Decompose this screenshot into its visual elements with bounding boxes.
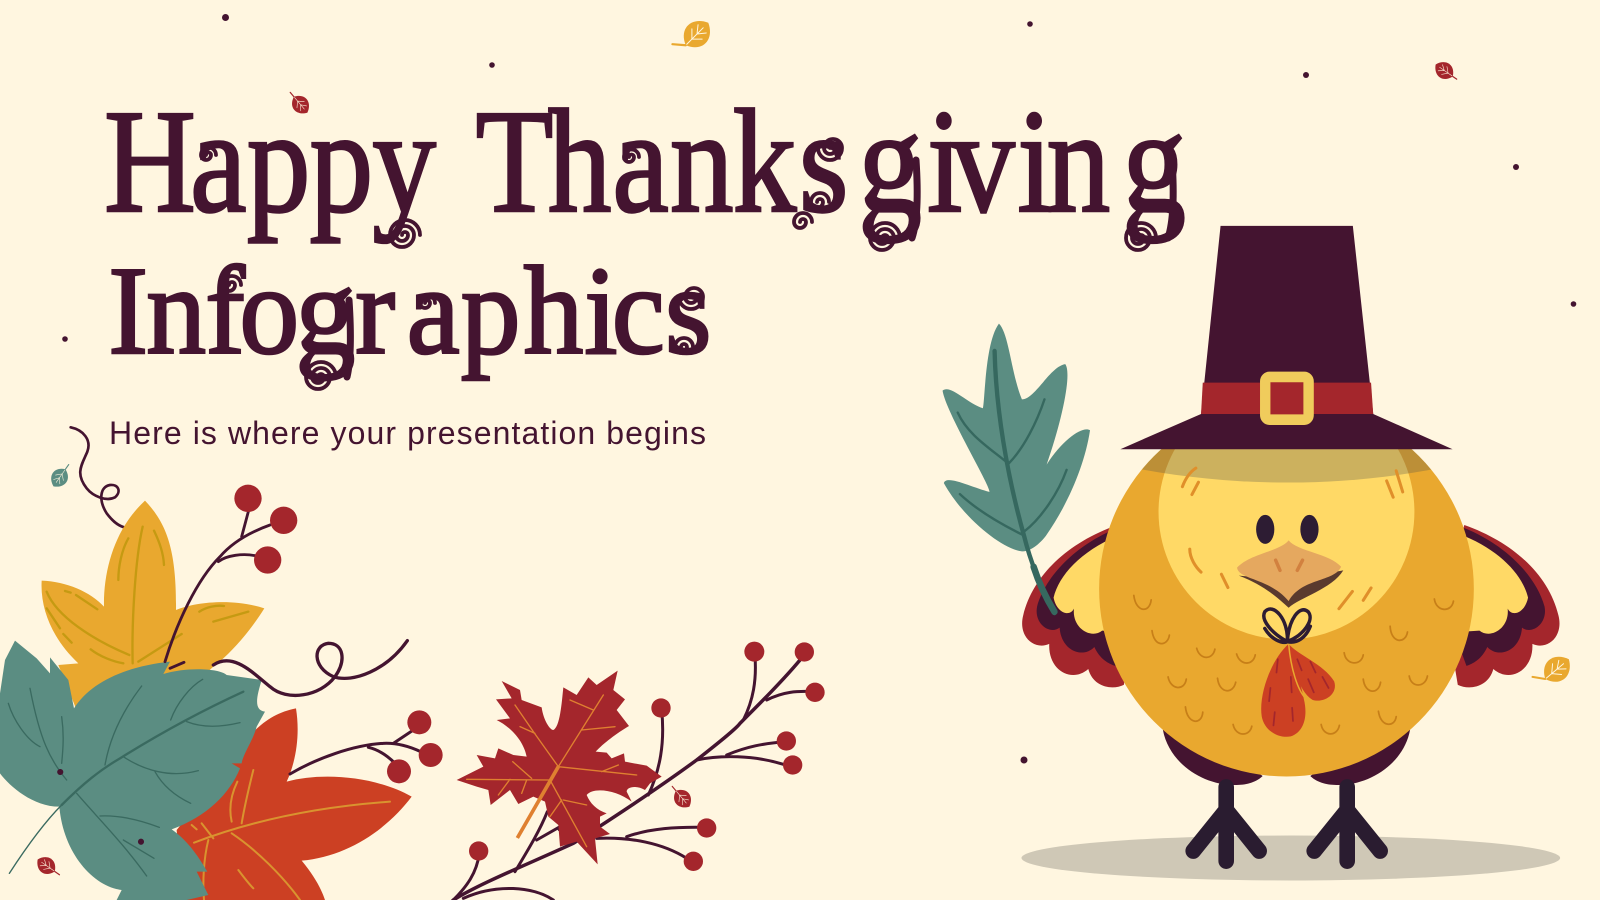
bow xyxy=(1264,609,1310,642)
title line 2: Infographics xyxy=(108,240,712,381)
berry branch xyxy=(447,642,825,900)
curly vine top xyxy=(71,427,124,527)
turkey illustration xyxy=(943,226,1560,880)
dots on teal leaf xyxy=(57,769,144,845)
body xyxy=(1099,401,1474,776)
small leaf: red top right xyxy=(1431,58,1461,86)
small leaf: red over title xyxy=(284,87,314,118)
title xyxy=(104,79,1186,381)
hand leaf xyxy=(943,324,1090,613)
wattle xyxy=(1261,644,1335,737)
beak xyxy=(1237,540,1343,608)
legs and feet xyxy=(1163,717,1410,861)
feather marks xyxy=(1134,595,1453,734)
title line 1: Happy Thanksgiving xyxy=(104,79,1186,243)
hat shadow xyxy=(1142,449,1431,482)
left wing xyxy=(1022,525,1137,687)
right wing xyxy=(1445,525,1559,687)
pilgrim hat xyxy=(1120,226,1453,449)
face marks xyxy=(1182,468,1403,609)
small leaf: red bottom left xyxy=(33,853,64,881)
eyes xyxy=(1256,515,1319,544)
upper berries xyxy=(165,485,297,668)
small leaf: gold top xyxy=(671,14,717,60)
face patch xyxy=(1158,449,1414,640)
curly vine right xyxy=(213,641,407,695)
lower berries xyxy=(290,710,443,783)
ground shadow xyxy=(1021,836,1560,880)
gold leaf xyxy=(42,501,264,710)
subtitle: Here is where your presentation begins xyxy=(109,415,706,451)
small leaf: gold right xyxy=(1531,650,1577,694)
small leaf: red on branch xyxy=(666,781,696,812)
branch and maple leaf xyxy=(447,642,825,900)
teal leaf xyxy=(0,641,265,900)
title swirls xyxy=(201,139,1173,389)
small leaf: teal xyxy=(47,460,75,491)
maple leaf xyxy=(457,671,662,864)
orange leaf xyxy=(177,708,412,900)
leaf cluster bottom left xyxy=(0,427,443,900)
